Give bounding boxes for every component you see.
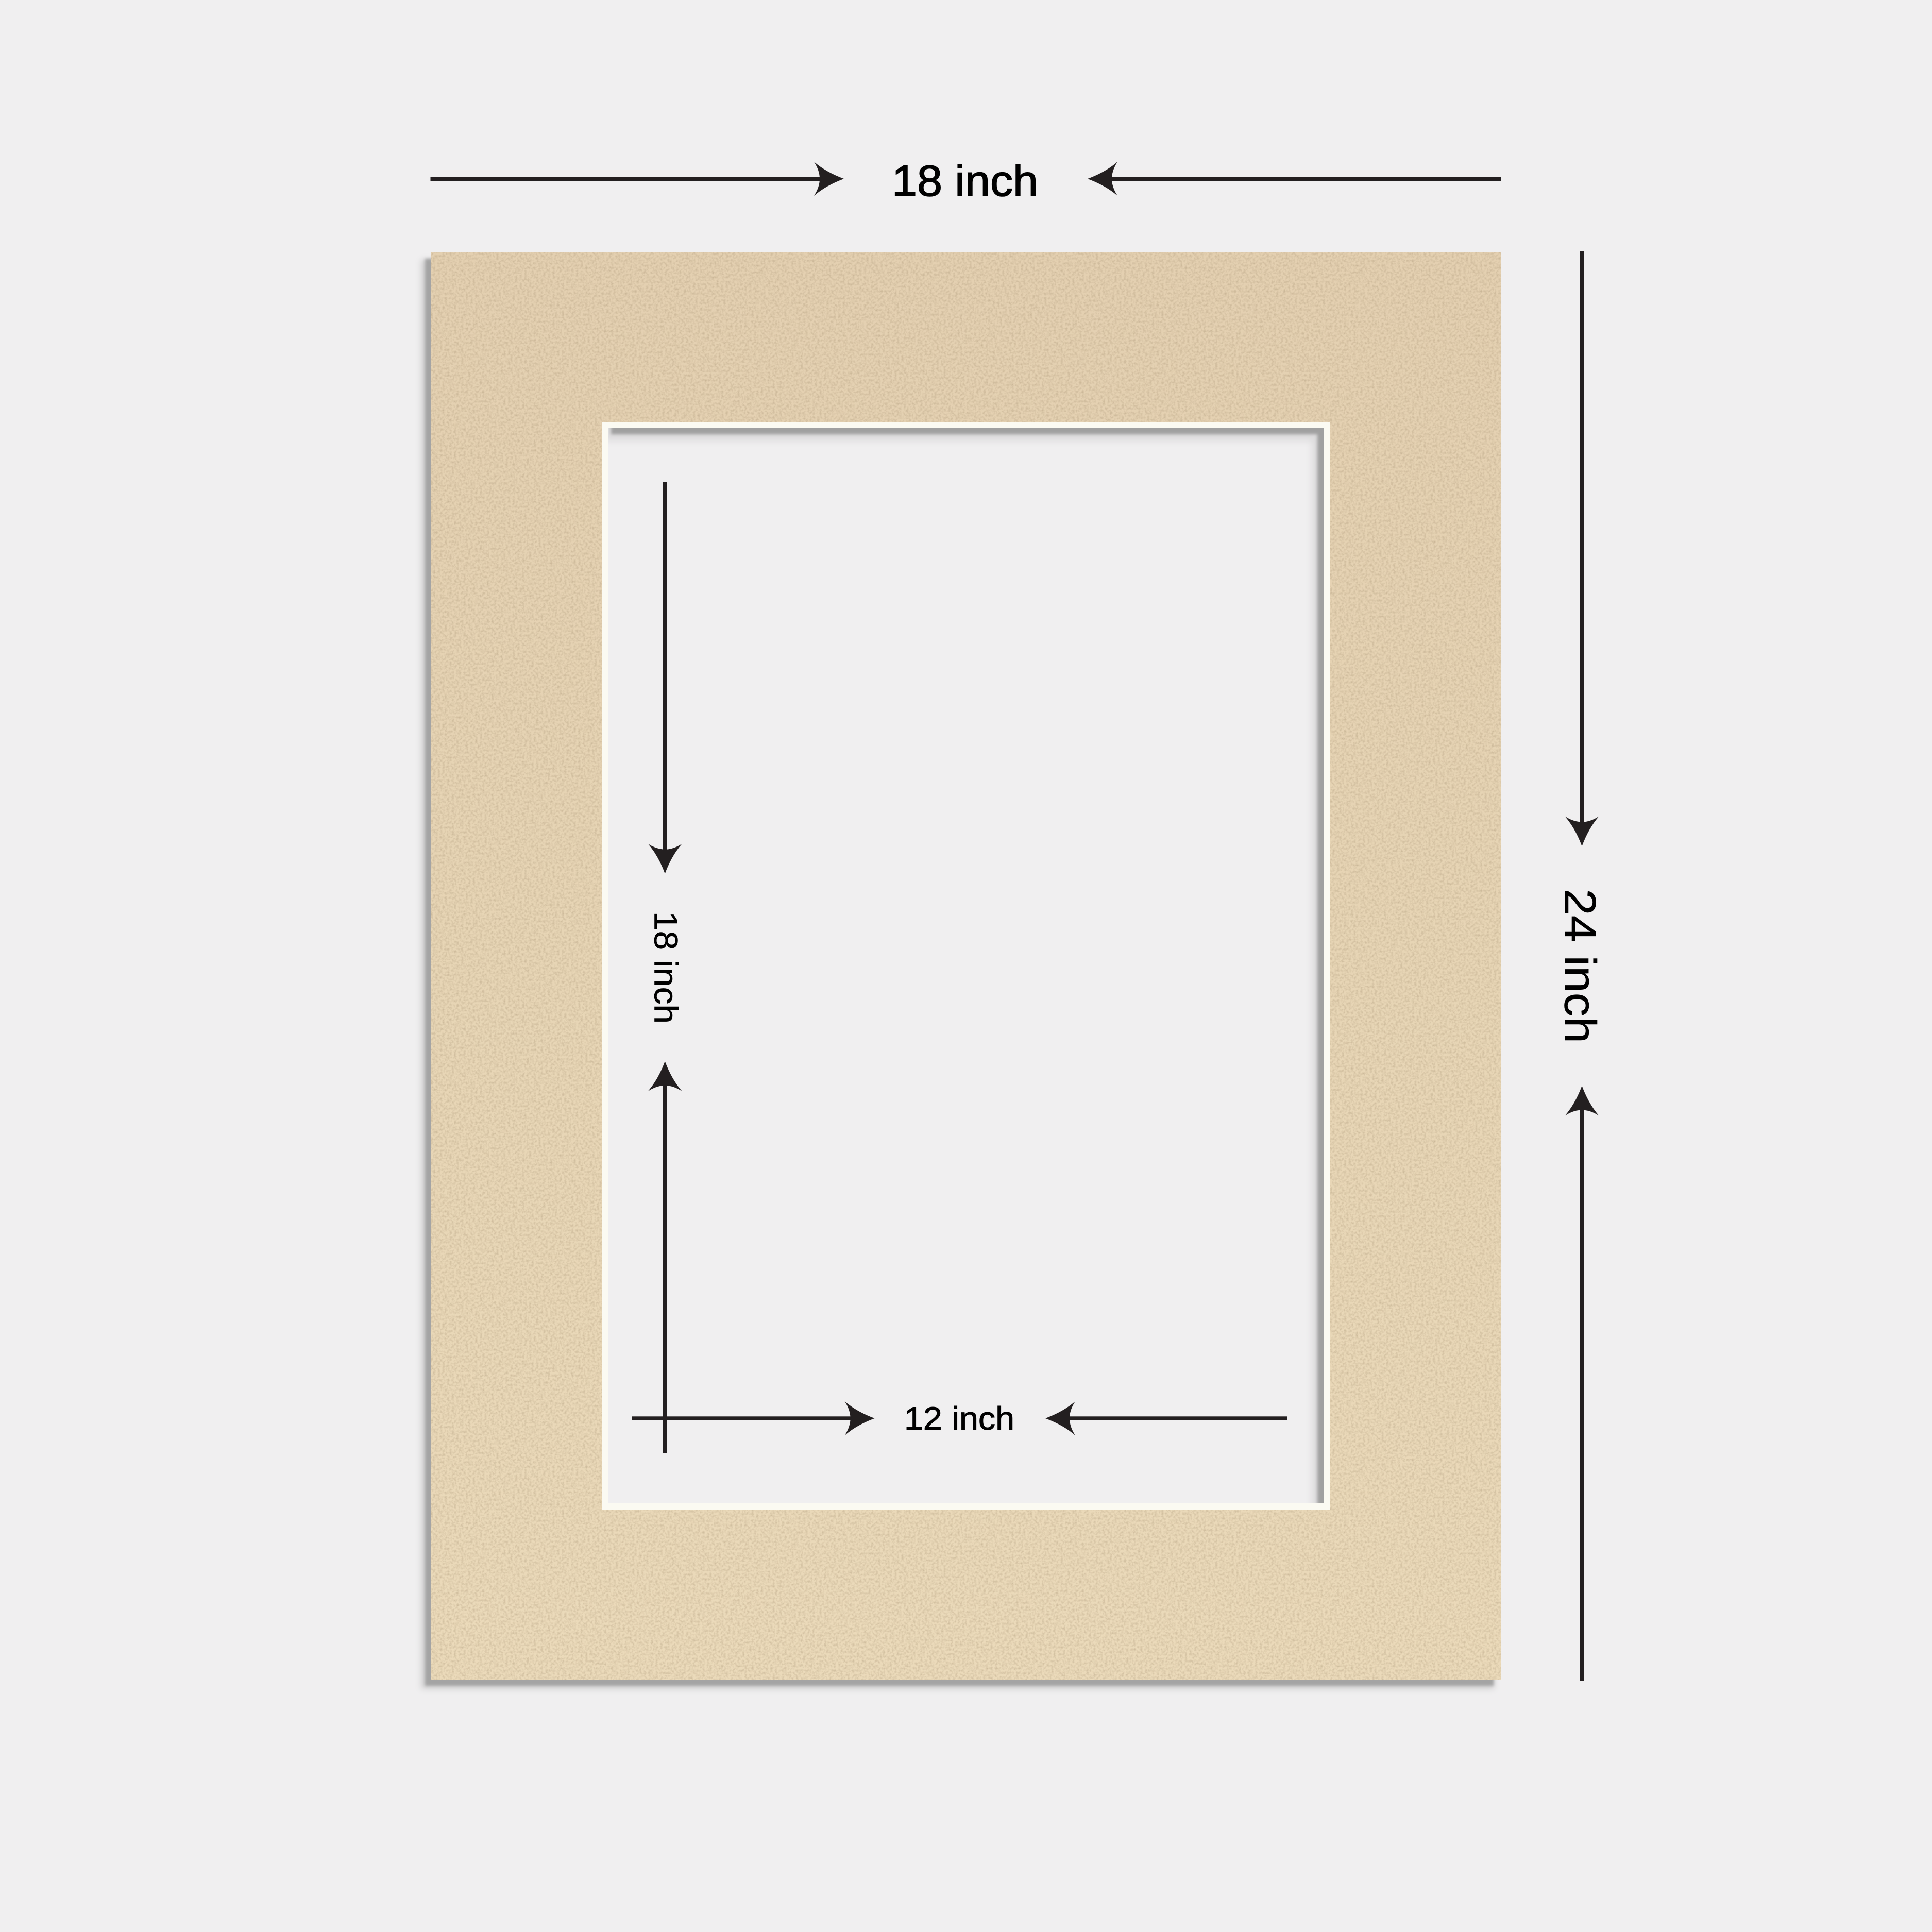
heading: 24 inch height: 24 inch	[1555, 889, 1604, 1043]
arrow: inner width, left	[632, 1401, 875, 1435]
arrow: right height, bottom	[1565, 1086, 1599, 1681]
arrow: top width, left	[431, 162, 844, 196]
heading: 18 inch width: 18 inch	[892, 157, 1038, 205]
arrow: top width, right	[1088, 162, 1501, 196]
arrow: inner height, top	[648, 482, 682, 874]
inner window shadow	[605, 412, 1340, 1520]
label: inner 12 inch width: 12 inch	[904, 1401, 1014, 1437]
window opening	[602, 422, 1330, 1510]
cream bevel edge	[602, 422, 1330, 1510]
label: inner 18 inch height: 18 inch	[648, 911, 685, 1024]
arrow: inner width, right	[1045, 1401, 1287, 1435]
mat frame with window opening	[431, 252, 1501, 1680]
panel: mat board	[421, 252, 1501, 1689]
arrow: right height, top	[1565, 251, 1599, 846]
outer drop shadow	[421, 259, 1494, 1689]
arrow: inner height, bottom	[648, 1061, 682, 1453]
